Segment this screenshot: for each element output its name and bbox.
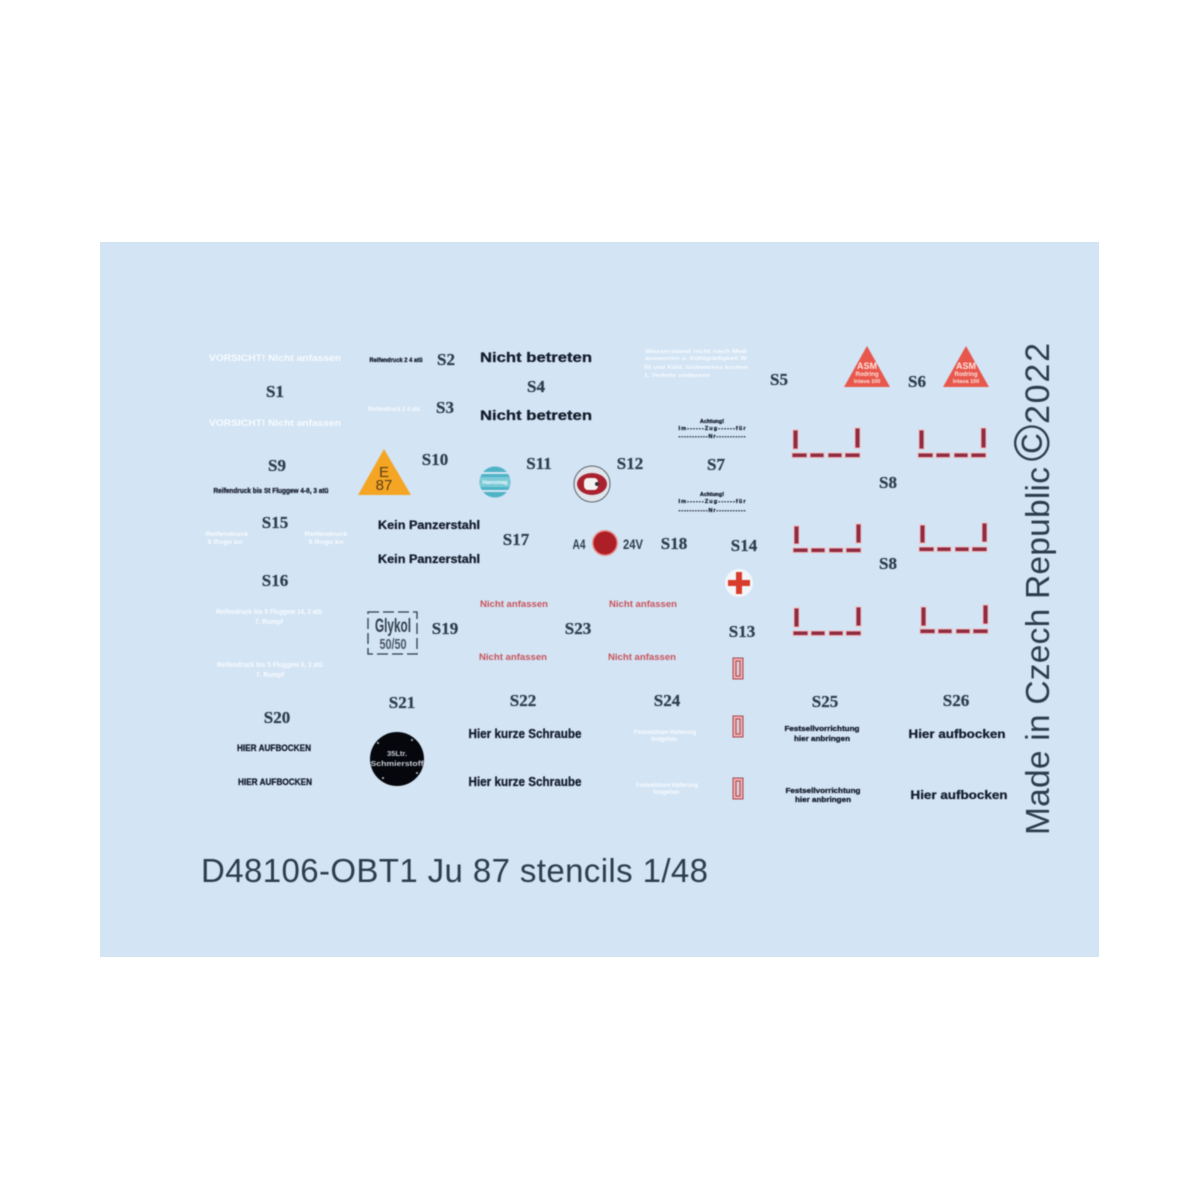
label: S15 stencil group: Reifendruck (206, 531, 249, 538)
label: S1 stencil group: VORSICHT! Nicht anfassen (209, 353, 341, 364)
vertical credit: made in Czech Republic 2022 (1004, 343, 1060, 835)
label: S16 stencil group (216, 571, 323, 679)
label: S22 stencil group (468, 691, 582, 789)
label: S11: S11 (526, 454, 552, 473)
label: S2 stencil group: Reifendruck 2 4 atü (370, 357, 423, 364)
icon: red rectangle marker 2 (733, 716, 743, 737)
label: S16 stencil group: Reifendruck bis 5 Fluggew 6, 3 atü (217, 662, 323, 669)
icon: red cross S14 (725, 569, 753, 597)
label: S7 stencil group: S7 (707, 455, 725, 474)
label: S22 stencil group: Hier kurze Schraube (468, 775, 582, 789)
label: S10: S10 (422, 450, 448, 469)
icon: ASM triangle S5: ASM (857, 361, 877, 371)
icon: E87 fuel triangle: 87 (376, 477, 392, 494)
label: S6: S6 (908, 372, 926, 391)
label: S14: S14 (731, 536, 758, 555)
label: S17 stencil group: S17 (503, 530, 530, 549)
icon: red rectangle marker 1 (733, 658, 743, 679)
label: S5 stencil group: 1. Verkehr umfassen (644, 373, 711, 379)
label: S7 stencil group: Achtung! (700, 419, 724, 425)
label: S3 stencil group (368, 398, 454, 417)
label: S16 stencil group: 7. Rumpf (255, 619, 284, 626)
label: S25 stencil group: Festsellvorrichtung (786, 786, 861, 795)
label: S25 stencil group: hier anbringen (795, 795, 851, 804)
icon: E87 fuel triangle: E (379, 464, 389, 481)
label: S26 stencil group: S26 (943, 691, 969, 710)
label: S8 lower: S8 (879, 554, 897, 573)
label: S23 stencil group: Nicht anfassen (609, 599, 677, 609)
icon: black lubricant roundel (370, 732, 424, 786)
label: S3 stencil group: Reifendruck 2 4 atü (368, 406, 420, 413)
label: S22 stencil group: S22 (510, 691, 536, 710)
label: S16 stencil group: 7. Rumpf (256, 672, 285, 679)
label: S20 stencil group: HIER AUFBOCKEN (238, 777, 312, 787)
icon: ASM triangle S6: Intava 100 (953, 379, 979, 385)
label: S15 stencil group: S15 (262, 513, 288, 532)
icon: E87 fuel triangle (358, 449, 411, 495)
vertical credit: made in Czech Republic 2022: Made in Czech Republic (1020, 467, 1057, 835)
label: S24 stencil group: festgehen (653, 790, 679, 796)
icon: Glykol 50/50 dashed box: Glykol (375, 616, 411, 637)
label: S4 stencil group: Nicht betreten (480, 407, 592, 423)
title: D48106-OBT1 Ju 87 stencils 1/48 (201, 852, 708, 889)
label: S17 stencil group (378, 520, 530, 566)
icon: red bracket 6 (920, 605, 988, 634)
icon: Glykol 50/50 dashed box: 50/50 (380, 636, 406, 653)
label: S8 upper: S8 (879, 473, 897, 492)
label: S1 stencil group (209, 353, 341, 429)
label: S7 stencil group: Im------Zug------für (678, 426, 746, 432)
icon: red bracket 5 (793, 607, 861, 636)
label: S7 stencil group: -----------Nr----------- (678, 508, 746, 514)
label: S5 stencil group: 50 und Kühl. Glühwerkes kochen (644, 365, 749, 371)
label: S15 stencil group: Reifendruck (304, 531, 348, 538)
label: S25 stencil group: hier anbringen (794, 734, 850, 743)
label: S5 stencil group (644, 349, 788, 389)
label: S26 stencil group (908, 691, 1008, 802)
label: S25 stencil group: S25 (812, 692, 838, 711)
label: S2 stencil group: S2 (437, 350, 455, 369)
label: S1 stencil group: VORSICHT! Nicht anfassen (209, 418, 341, 429)
label: S7 stencil group: -----------Nr----------- (678, 434, 746, 440)
label: S24 stencil group: S24 (654, 691, 681, 710)
label: S4 stencil group: Nicht betreten (480, 349, 592, 365)
label: S23 stencil group: Nicht anfassen (479, 652, 547, 662)
label: S21: S21 (389, 693, 415, 712)
vertical credit: made in Czech Republic 2022: 2022 (1019, 343, 1057, 424)
label: S24 stencil group: festgehen (651, 737, 677, 743)
label: S15 stencil group: 5 Rogn kn (308, 539, 344, 546)
label: S4 stencil group: S4 (527, 377, 545, 396)
label: S20 stencil group (237, 708, 312, 787)
icon: red rectangle marker 3 (733, 778, 743, 799)
label: S20 stencil group: S20 (264, 708, 290, 727)
icon: red bracket 4 (919, 523, 987, 552)
icon: ASM triangle S6 (943, 346, 989, 387)
icon: Glykol 50/50 dashed box (368, 612, 417, 654)
label: S20 stencil group: HIER AUFBOCKEN (237, 743, 311, 753)
icon: red emblem S12 (574, 466, 610, 502)
label: S23 stencil group (479, 599, 677, 662)
vertical credit: made in Czech Republic 2022: © (1004, 424, 1060, 461)
label: S12: S12 (617, 454, 643, 473)
icon: red bracket 2 (918, 428, 986, 458)
icon: A4 24V red roundel: 24V (623, 536, 644, 552)
label: S25 stencil group (784, 692, 861, 804)
icon: teal roundel S11 (479, 466, 511, 498)
icon: ASM triangle S5: Intava 100 (854, 379, 880, 385)
icon: A4 24V red roundel (572, 530, 644, 556)
label: S26 stencil group: Hier aufbocken (908, 727, 1006, 741)
label: S3 stencil group: S3 (436, 398, 454, 417)
label: S1 stencil group: S1 (266, 382, 284, 401)
label: S15 stencil group: 5 Rogn kn (208, 539, 243, 546)
label: S24 stencil group: Festsetzbare Halterung (636, 783, 698, 789)
label: S7 stencil group: Im------Zug------für (678, 499, 746, 505)
label: S23 stencil group: Nicht anfassen (608, 652, 676, 662)
icon: ASM triangle S6: Rodring (954, 372, 978, 378)
label: S17 stencil group: Kein Panzerstahl (378, 554, 480, 566)
icon: ASM triangle S6: ASM (956, 361, 976, 371)
label: S4 stencil group (480, 349, 592, 423)
label: S24 stencil group: Festsetzbare Halterung (634, 730, 696, 736)
label: S9 stencil group: S9 (268, 456, 286, 475)
label: S23 stencil group: S23 (565, 619, 591, 638)
icon: black lubricant roundel: 35Ltr. (387, 749, 407, 758)
icon: ASM triangle S5: Rodring (856, 372, 879, 378)
icon: A4 24V red roundel: A4 (572, 536, 586, 552)
icon: ASM triangle S5 (844, 346, 890, 387)
label: S25 stencil group: Festsellvorrichtung (784, 724, 860, 733)
label: S22 stencil group: Hier kurze Schraube (468, 727, 582, 741)
label: S19: S19 (432, 619, 458, 638)
label: S7 stencil group: Achtung! (700, 492, 724, 498)
panel: decal sheet background (100, 242, 1099, 957)
label: S9 stencil group (214, 456, 329, 495)
icon: black lubricant roundel: Schmierstoff (370, 759, 424, 768)
label: S26 stencil group: Hier aufbocken (910, 788, 1008, 802)
label: S5 stencil group: Wasserstand nicht nach Maß (645, 349, 748, 355)
label: S9 stencil group: Reifendruck bis St Fluggew 4-8, 3 atü (214, 486, 329, 495)
label: S7 stencil group (678, 419, 746, 514)
label: S17 stencil group: Kein Panzerstahl (378, 520, 480, 532)
label: S15 stencil group (206, 513, 348, 546)
label: S16 stencil group: S16 (262, 571, 288, 590)
icon: red bracket 3 (793, 524, 861, 552)
label: S5 stencil group: auswerten u. Kühlgrädigkeit W (645, 356, 748, 362)
label: S23 stencil group: Nicht anfassen (480, 599, 548, 609)
label: S2 stencil group (370, 350, 455, 369)
label: S16 stencil group: Reifendruck bis 5 Fluggew 14, 3 atü (216, 609, 322, 616)
label: S13: S13 (729, 622, 755, 641)
label: S5 stencil group: S5 (770, 370, 788, 389)
label: S24 stencil group (634, 691, 698, 796)
label: S18: S18 (661, 534, 687, 553)
icon: red bracket 1 (792, 428, 860, 458)
icon: teal roundel S11: Hanomag (482, 480, 508, 486)
